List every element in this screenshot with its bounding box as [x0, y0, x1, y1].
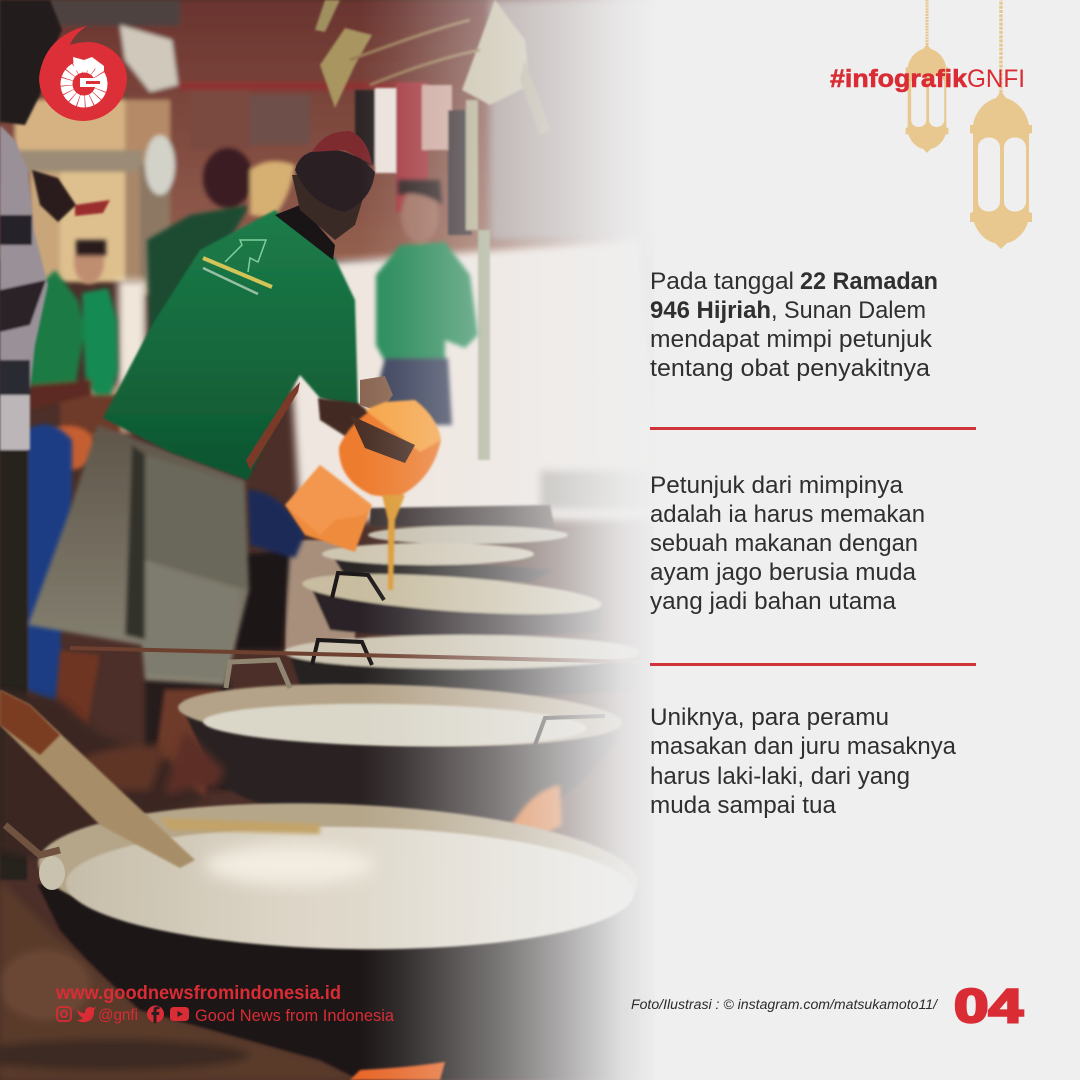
hashtag heading: GNFI: [967, 65, 1025, 93]
text block: first paragraph: tentang obat penyakitnya: [650, 355, 931, 382]
lantern: small: [906, 0, 948, 153]
footer: website and social handles: [55, 983, 395, 1025]
ground: [0, 690, 360, 1080]
icon: youtube: [170, 1007, 189, 1021]
text block: third paragraph: masakan dan juru masaknya: [650, 733, 957, 760]
shirt print: [203, 240, 272, 294]
far pans: [284, 505, 640, 696]
front pan: [0, 690, 640, 1080]
text block: first paragraph: [650, 268, 938, 382]
footer: website and social handles: Good News from Indonesia: [195, 1006, 395, 1025]
photo fade to light panel: [360, 0, 660, 1080]
page number: 04: [954, 979, 1023, 1032]
text block: second paragraph: ayam jago berusia muda: [650, 559, 917, 586]
icon: facebook: [147, 1006, 164, 1023]
lantern: large: [970, 0, 1032, 249]
background workers: [25, 148, 478, 470]
middle pan: [165, 660, 623, 842]
icon: twitter: [77, 1007, 96, 1022]
photo credit: Foto/Ilustrasi : © instagram.com/matsukamoto11/: [631, 997, 938, 1012]
arm: [318, 398, 415, 464]
text block: first paragraph: 22 Ramadan: [800, 268, 938, 295]
text block: first paragraph: 946 Hijriah: [650, 297, 771, 324]
forearm over bucket: [350, 415, 415, 463]
hashtag heading: #infografik: [830, 65, 967, 93]
logo: GNFI red badge: [39, 26, 127, 121]
text block: second paragraph: yang jadi bahan utama: [650, 588, 897, 615]
text block: second paragraph: [650, 472, 925, 615]
orange buckets: [285, 400, 441, 590]
text block: second paragraph: sebuah makanan dengan: [650, 530, 918, 557]
laundry and leaves: [315, 0, 550, 460]
text block: third paragraph: harus laki-laki, dari yang: [650, 763, 910, 790]
wooden paddle: [0, 690, 195, 868]
green shirt: [103, 210, 358, 480]
icon: instagram: [57, 1007, 71, 1021]
text block: first paragraph: , Sunan Dalem: [771, 297, 926, 324]
head and cap: [292, 175, 370, 240]
footer: website and social handles: www.goodnewsfromindonesia.id: [55, 983, 341, 1004]
white wall: [90, 0, 660, 520]
text block: third paragraph: [650, 704, 957, 819]
jeans: [28, 425, 249, 685]
text block: third paragraph: Uniknya, para peramu: [650, 704, 889, 731]
building background: [0, 0, 660, 295]
footer: website and social handles: @gnfi: [98, 1007, 138, 1024]
collar: [275, 205, 335, 260]
text block: third paragraph: muda sampai tua: [650, 792, 837, 819]
pan handles: [312, 573, 384, 665]
text block: second paragraph: adalah ia harus memakan: [650, 501, 925, 528]
text block: first paragraph: mendapat mimpi petunjuk: [650, 326, 933, 353]
text block: first paragraph: Pada tanggal: [650, 268, 794, 295]
blue barrel: [27, 424, 72, 710]
panel: cooking photo: [0, 0, 660, 1080]
rod: [70, 648, 640, 662]
legs and dark pants: [50, 490, 305, 795]
text block: second paragraph: Petunjuk dari mimpinya: [650, 472, 904, 499]
left man: [0, 0, 110, 880]
hashtag heading: [830, 65, 1025, 93]
main man: [28, 131, 415, 795]
fire: [350, 1062, 445, 1080]
